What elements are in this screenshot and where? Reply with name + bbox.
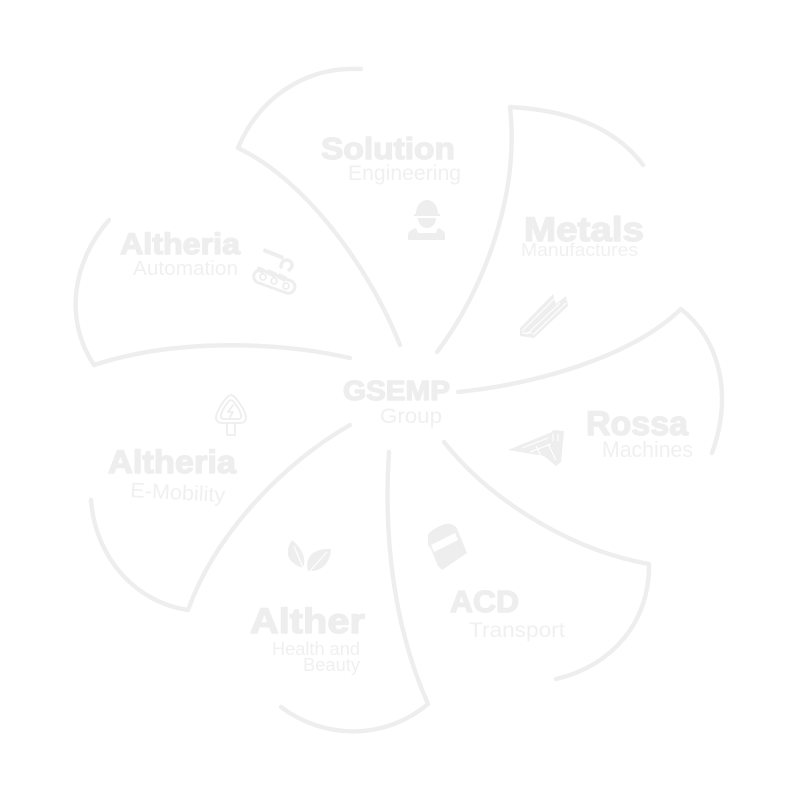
icon: metal channel profile (520, 294, 568, 338)
label: Solution Engineering: Solution (321, 131, 455, 166)
petal: ACD Transport (444, 442, 649, 679)
label: Alther Health and Beauty: Health and (272, 639, 360, 659)
icon: worker with hard hat (408, 200, 445, 240)
label: Altheria Automation: Altheria (120, 228, 240, 261)
icon: robotic conveyor (252, 248, 297, 295)
label: Metals Manufactures (521, 211, 644, 260)
label: Solution Engineering: Engineering (348, 162, 461, 185)
label: Altheria Automation: Automation (133, 258, 238, 280)
label: Alther Health and Beauty (250, 602, 365, 675)
petal: Rossa Machines (458, 309, 722, 453)
label: Metals Manufactures: Metals (524, 211, 644, 249)
label: Alther Health and Beauty: Alther (250, 602, 365, 641)
label: Rossa Machines: Rossa (586, 405, 689, 443)
center label: GSEMP Group: GSEMP (343, 375, 450, 406)
petal: Solution Engineering (238, 69, 400, 345)
icon: two leaves (288, 540, 331, 572)
petal: Altheria E-Mobility (91, 425, 350, 610)
label: Rossa Machines: Machines (602, 437, 693, 462)
petal: Alther Health and Beauty (281, 452, 428, 731)
icon: electric warning sign (216, 395, 246, 435)
petal: Metals Manufactures (437, 107, 643, 352)
petal: Altheria Automation (76, 220, 350, 365)
label: Alther Health and Beauty: Beauty (303, 655, 360, 675)
label: Altheria E-Mobility (108, 444, 236, 507)
label: ACD Transport: Transport (469, 619, 565, 642)
label: Altheria Automation (120, 228, 240, 280)
center label: GSEMP Group: Group (380, 405, 442, 428)
center label: GSEMP Group (343, 375, 450, 428)
label: Altheria E-Mobility: Altheria (108, 444, 236, 480)
label: Rossa Machines (586, 405, 693, 462)
label: Solution Engineering (321, 131, 461, 185)
label: Altheria E-Mobility: E-Mobility (130, 479, 226, 507)
label: Metals Manufactures: Manufactures (521, 240, 638, 260)
label: ACD Transport (450, 584, 565, 642)
icon: truck front (428, 524, 467, 570)
label: ACD Transport: ACD (450, 584, 519, 619)
icon: crane machine (508, 430, 564, 466)
